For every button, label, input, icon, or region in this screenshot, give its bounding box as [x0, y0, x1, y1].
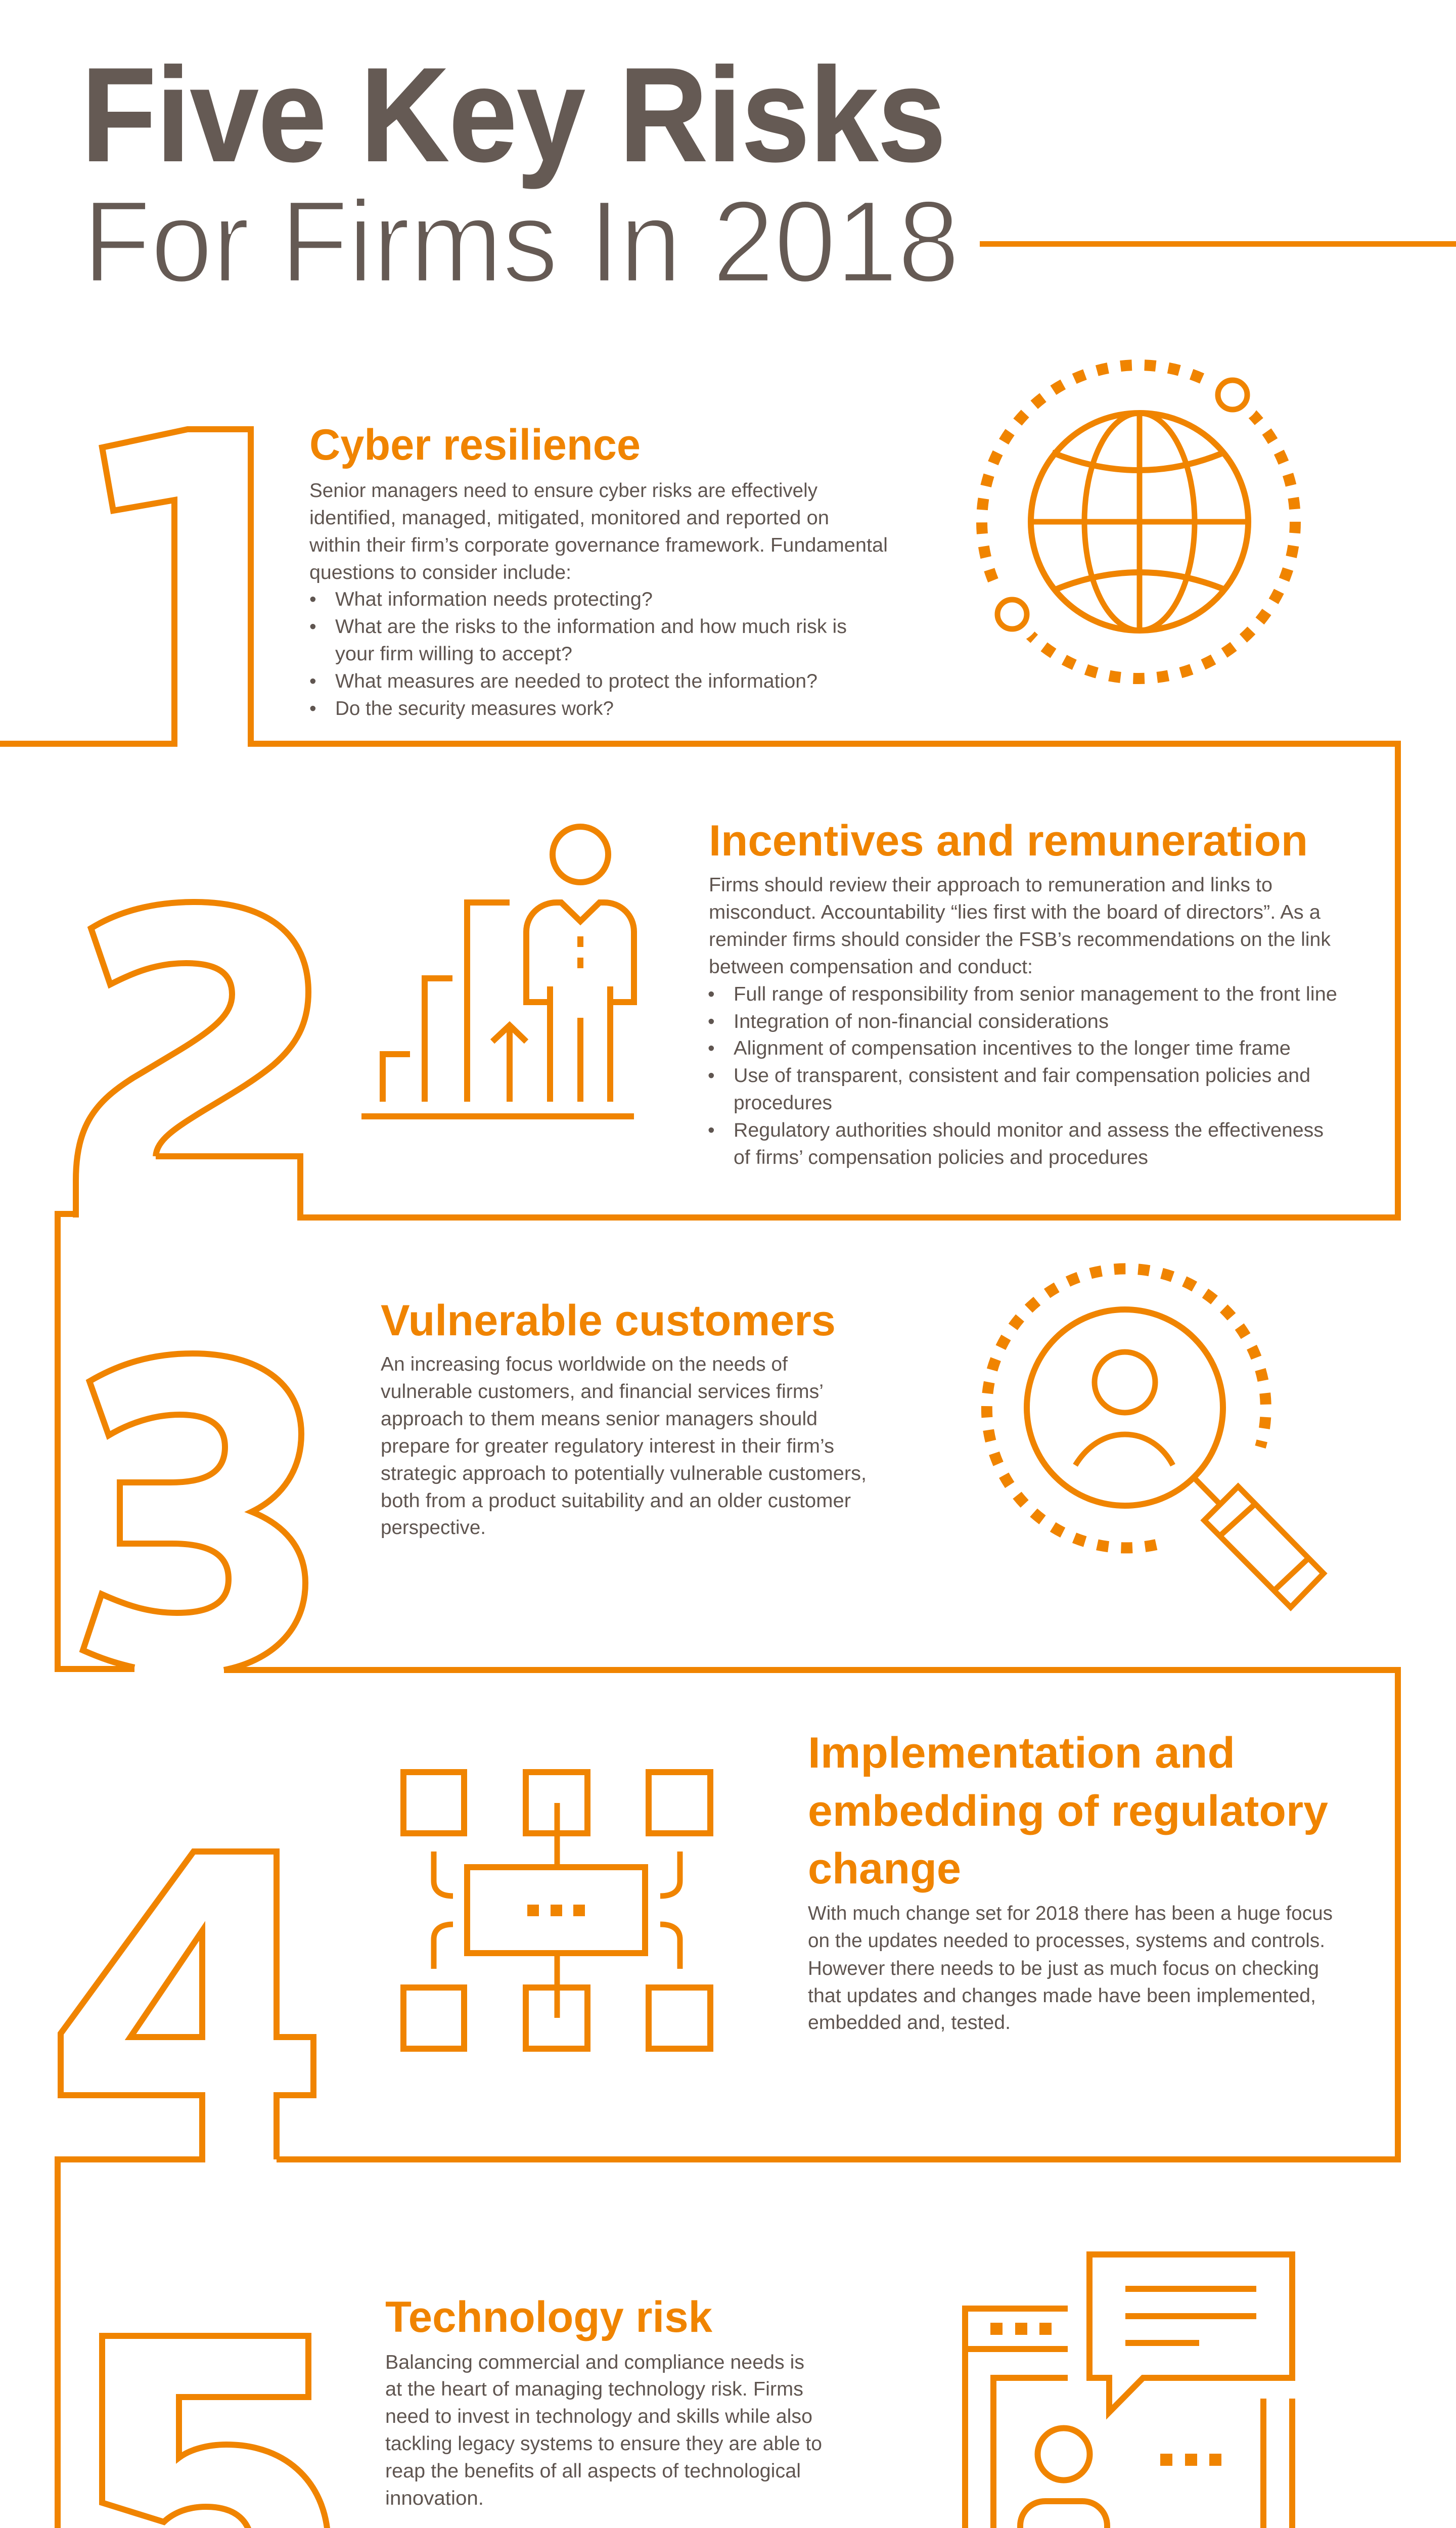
text block: your firm willing to accept? — [335, 643, 572, 665]
title rule — [980, 241, 1456, 247]
icon: person with rising bars — [361, 827, 634, 1119]
text block: An increasing focus worldwide on the needs of — [381, 1353, 788, 1375]
text block: approach to them means senior managers should — [381, 1408, 817, 1430]
text block: Firms should review their approach to remuneration and links to — [709, 874, 1272, 896]
heading: Implementation and — [808, 1729, 1235, 1777]
heading — [808, 1729, 1328, 1893]
text block: However there needs to be just as much focus on checking — [808, 1958, 1319, 1979]
numeral 2 outline — [76, 902, 308, 1217]
text block: Integration of non-financial considerations — [734, 1011, 1109, 1032]
text block: need to invest in technology and skills while also — [385, 2406, 812, 2427]
text block: What are the risks to the information and how much risk is — [335, 616, 847, 638]
text block: procedures — [734, 1092, 832, 1114]
title — [81, 40, 1456, 306]
text block: at the heart of managing technology risk. Firms — [385, 2378, 803, 2400]
text block: embedded and, tested. — [808, 2012, 1011, 2034]
numeral 3 outline — [58, 1214, 134, 1669]
text block: Senior managers need to ensure cyber risks are effectively — [309, 480, 817, 502]
heading: embedding of regulatory — [808, 1787, 1328, 1835]
text block: Balancing commercial and compliance needs is — [385, 2352, 804, 2373]
panel: cyber resilience — [309, 365, 1295, 719]
numeral 3 glyph — [83, 1353, 305, 1670]
text block — [708, 874, 1337, 1168]
text block: strategic approach to potentially vulnerable customers, — [381, 1463, 867, 1484]
text block — [385, 2352, 822, 2509]
text block: misconduct. Accountability “lies first with the board of directors”. As a — [709, 901, 1321, 923]
text block: on the updates needed to processes, systems and controls. — [808, 1930, 1325, 1952]
text block: identified, managed, mitigated, monitored and reported on — [309, 507, 829, 529]
text block: Full range of responsibility from senior management to the front line — [734, 983, 1337, 1005]
numeral 5 glyph — [91, 2336, 328, 2528]
text block: Do the security measures work? — [335, 698, 614, 719]
panel: implementation and embedding of regulatory change — [403, 1729, 1333, 2049]
panel: technology risk — [385, 2254, 1292, 2528]
text block: vulnerable customers, and financial services firms’ — [381, 1381, 824, 1403]
text block: • — [708, 983, 715, 1005]
text block: What information needs protecting? — [335, 589, 653, 610]
text block: • — [309, 589, 316, 610]
text block: Use of transparent, consistent and fair compensation policies and — [734, 1065, 1310, 1087]
text block: reminder firms should consider the FSB’s recommendations on the link — [709, 929, 1331, 951]
numeral 4 counter — [130, 1931, 202, 2037]
icon: globe — [982, 365, 1295, 679]
icon: magnifying glass over person — [987, 1269, 1324, 1607]
heading: Technology risk — [385, 2293, 712, 2341]
frame section 4 — [224, 1670, 1398, 2159]
numeral 5 frame — [58, 2156, 161, 2528]
text block: reap the benefits of all aspects of technological — [385, 2460, 801, 2482]
text block: • — [708, 1011, 715, 1032]
text block: both from a product suitability and an older customer — [381, 1490, 851, 1512]
text block: that updates and changes made have been implemented, — [808, 1985, 1316, 2007]
panel: vulnerable customers — [381, 1269, 1324, 1607]
text block: between compensation and conduct: — [709, 956, 1033, 978]
text block: Alignment of compensation incentives to the longer time frame — [734, 1037, 1291, 1059]
heading: Cyber resilience — [309, 421, 641, 469]
heading: Incentives and remuneration — [709, 817, 1308, 865]
frame section 2 — [156, 744, 1398, 1217]
icon: chat window with person — [965, 2254, 1292, 2528]
text block: tackling legacy systems to ensure they are able to — [385, 2433, 822, 2455]
text block: questions to consider include: — [309, 562, 571, 583]
text block: With much change set for 2018 there has been a huge focus — [808, 1903, 1333, 1924]
text block: • — [309, 670, 316, 692]
text block — [381, 1353, 867, 1539]
text block: perspective. — [381, 1517, 486, 1539]
text block — [808, 1903, 1333, 2034]
panel: incentives and remuneration — [361, 817, 1337, 1168]
numeral 1 outline — [0, 429, 251, 744]
heading: Vulnerable customers — [381, 1296, 836, 1345]
numeral 4 outline — [58, 1852, 313, 2159]
text block: of firms’ compensation policies and procedures — [734, 1147, 1148, 1168]
heading: change — [808, 1844, 961, 1893]
text block: prepare for greater regulatory interest in their firm’s — [381, 1435, 834, 1457]
text block: • — [708, 1119, 715, 1141]
text block: Regulatory authorities should monitor and assess the effectiveness — [734, 1119, 1324, 1141]
text block: • — [309, 616, 316, 638]
title line 2: For Firms In 2018 — [83, 176, 960, 306]
text block: • — [708, 1037, 715, 1059]
text block: within their firm’s corporate governance framework. Fundamental — [309, 534, 888, 556]
text block: • — [309, 698, 316, 719]
text block: What measures are needed to protect the information? — [335, 670, 817, 692]
text block — [309, 480, 888, 719]
text block: • — [708, 1065, 715, 1087]
title line 1: Five Key Risks — [81, 40, 946, 190]
icon: connected process boxes — [403, 1772, 710, 2049]
text block: innovation. — [385, 2488, 484, 2509]
